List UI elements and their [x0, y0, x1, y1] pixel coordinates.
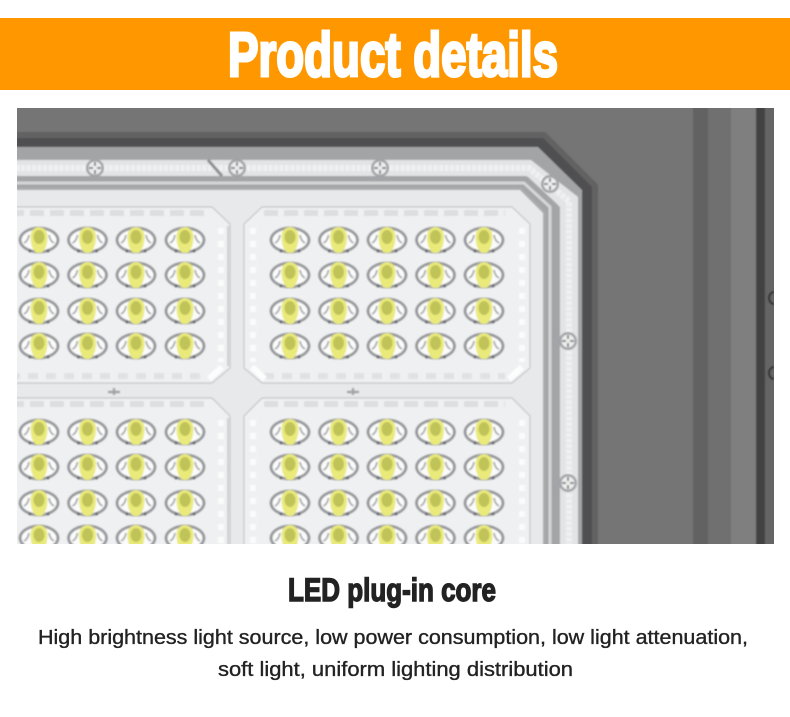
- textured frame strip: [10, 160, 578, 550]
- photo: LED lamp close-up: [10, 100, 780, 552]
- LED array: top right: [270, 226, 504, 360]
- lamp housing: [10, 100, 780, 550]
- LED array: top left: [18, 226, 206, 360]
- lamp frame: [10, 147, 582, 550]
- module: bottom left: [10, 398, 230, 550]
- LED array: bottom left: [18, 418, 206, 552]
- module: top left: [10, 207, 230, 383]
- LED array: bottom right: [270, 418, 504, 552]
- light panel: [10, 187, 546, 550]
- banner: orange title bar: [0, 18, 790, 90]
- subheading: LED plug-in core: [288, 572, 496, 608]
- description text: [38, 627, 748, 681]
- description text: High brightness light source, low power consumption, low light attenuation,: [38, 627, 748, 649]
- frame screws: [86, 159, 577, 492]
- module: bottom right: [244, 398, 530, 550]
- recessed dark bezel: [10, 138, 592, 550]
- inner ledge: [526, 176, 556, 204]
- title: Product details: [228, 21, 558, 90]
- description text: soft light, uniform lighting distribution: [218, 659, 573, 681]
- module: top right: [244, 207, 530, 383]
